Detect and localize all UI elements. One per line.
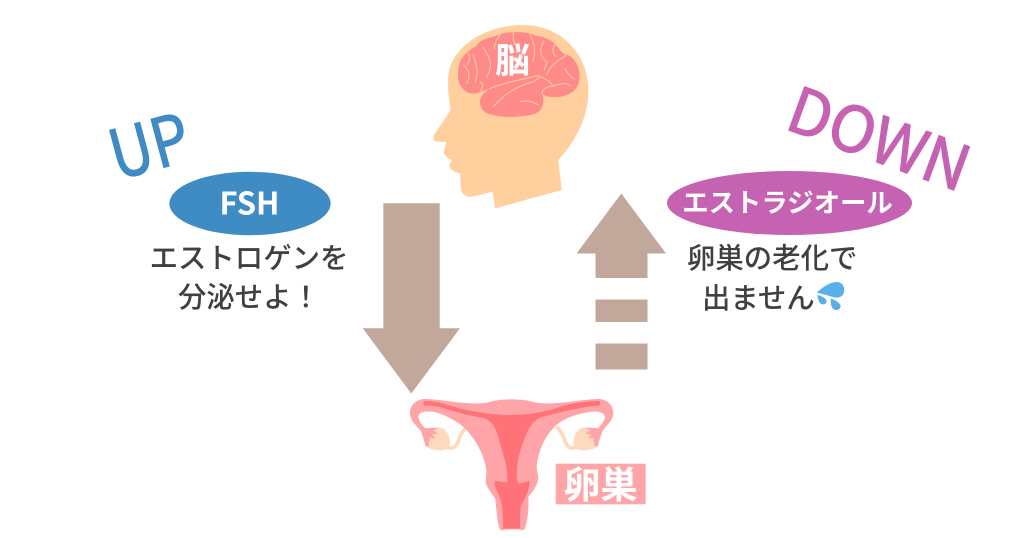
text: estradiol message: 卵巣の老化で <box>687 243 857 275</box>
text: FSH message: エストロゲンを <box>150 243 348 275</box>
badge: FSH <box>169 172 331 235</box>
arrow: dashed upward <box>576 194 666 370</box>
uterus inner <box>423 401 600 529</box>
text: FSH message <box>150 243 348 314</box>
right ligament and ovary <box>557 427 603 450</box>
text: FSH message: 分泌せよ！ <box>178 282 320 314</box>
heading: UP: UP <box>97 83 199 199</box>
badge: estradiol: エストラジオール <box>682 188 893 218</box>
text: estradiol message: 出ません <box>702 283 815 315</box>
head silhouette <box>433 25 588 208</box>
label: 脳: 脳 <box>495 42 530 81</box>
badge: estradiol <box>667 171 912 235</box>
badge: FSH: FSH <box>219 178 280 224</box>
left ligament and ovary <box>420 427 467 450</box>
uterus outer <box>410 399 613 530</box>
icon: head with brain <box>433 25 588 208</box>
arrow: downward <box>363 203 460 394</box>
label: 卵巣: 卵巣 <box>564 465 638 506</box>
icon: uterus and ovaries <box>410 399 613 530</box>
heading: DOWN: DOWN <box>777 60 984 210</box>
icon: sweat drops <box>817 282 844 310</box>
text: estradiol message <box>687 243 857 315</box>
brain <box>458 32 580 117</box>
